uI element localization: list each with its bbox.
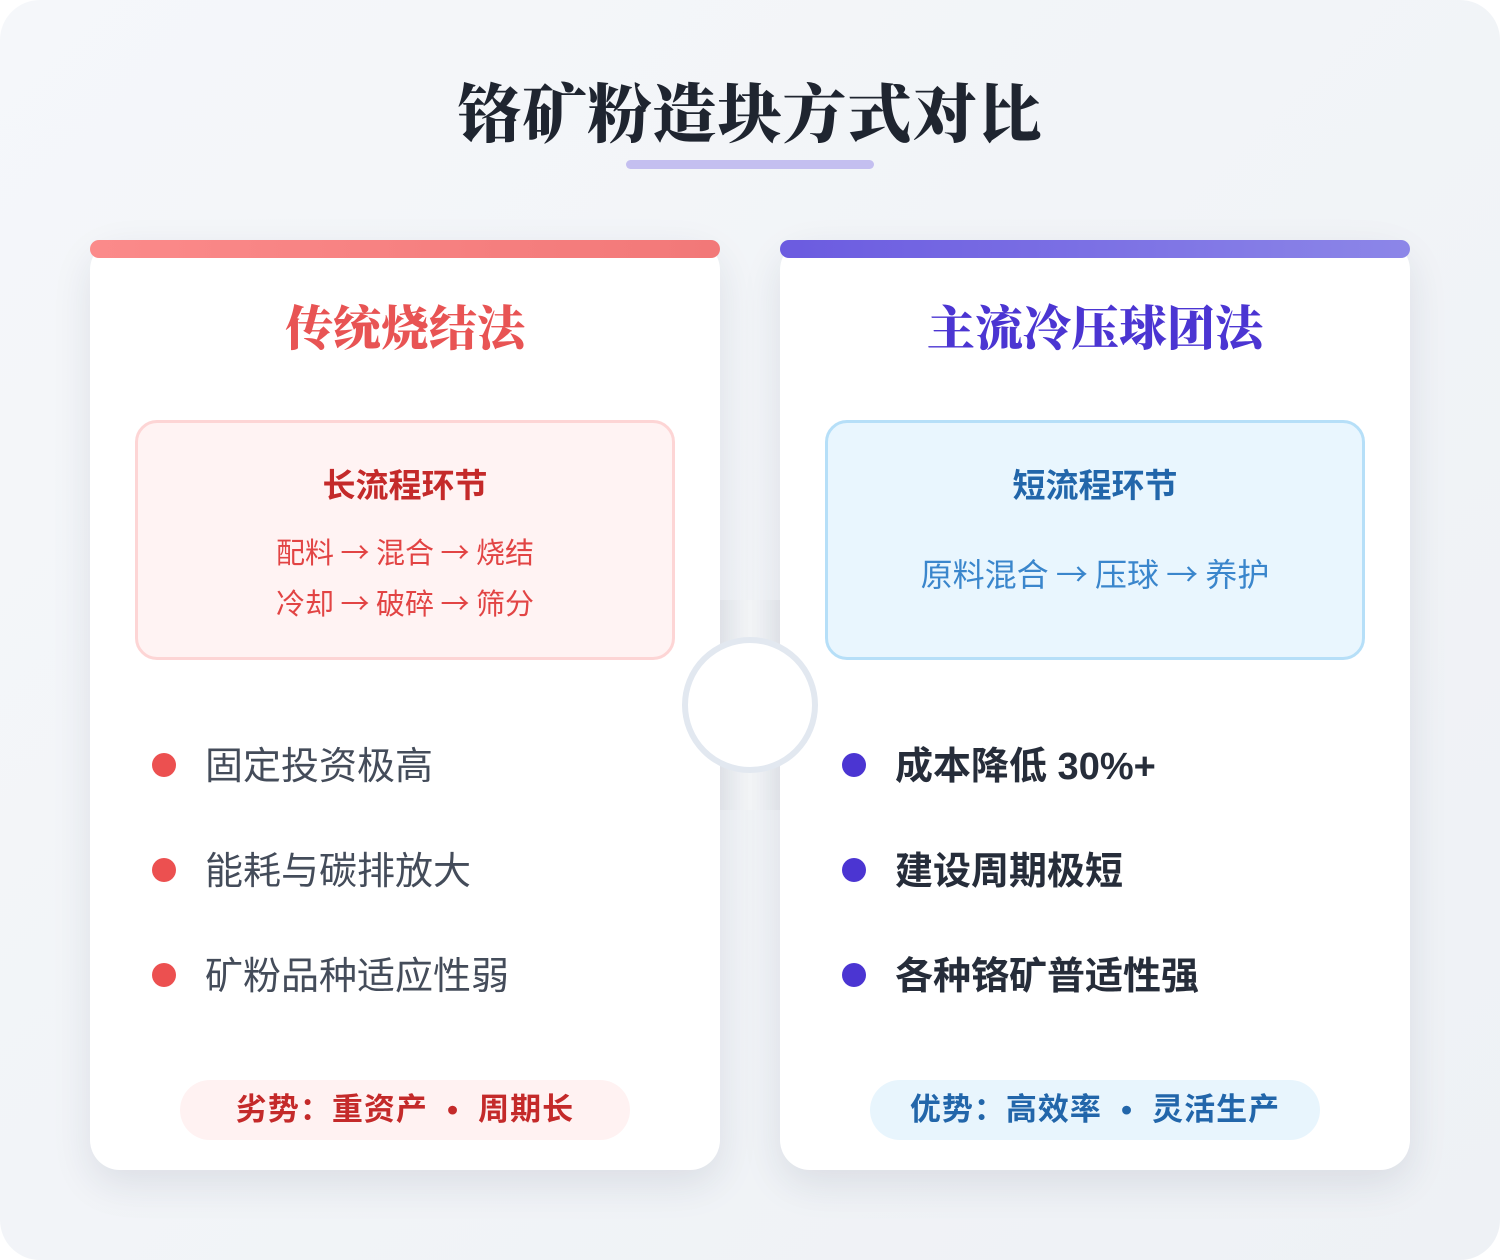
connector bar	[720, 600, 780, 810]
heading: 主流冷压球团法	[927, 290, 1263, 359]
panel: traditional sintering	[90, 240, 720, 1170]
process box: 原料混合 → 压球 → 养护	[921, 550, 1269, 596]
center circle	[682, 637, 818, 773]
panel: cold pressing: 成本降低 30%+	[895, 746, 1156, 788]
panel: traditional sintering: 固定投资极高	[205, 746, 433, 788]
title: 铬矿粉造块方式对比	[458, 64, 1042, 156]
pill: 劣势：重资产 • 周期长	[236, 1092, 574, 1127]
process box	[135, 420, 675, 660]
panel: cold pressing: 各种铬矿普适性强	[895, 956, 1199, 998]
pill	[180, 1080, 630, 1140]
process box	[825, 420, 1365, 660]
process box: 冷却 → 破碎 → 筛分	[276, 581, 534, 623]
pill: 优势：高效率 • 灵活生产	[910, 1092, 1280, 1127]
panel: traditional sintering: 能耗与碳排放大	[205, 851, 471, 893]
process box: 短流程环节	[1012, 467, 1178, 504]
heading: 传统烧结法	[285, 290, 525, 359]
list	[152, 746, 509, 998]
process box: 长流程环节	[322, 467, 488, 504]
list	[842, 746, 1199, 998]
pill	[870, 1080, 1320, 1140]
panel: cold pressing: 建设周期极短	[895, 851, 1123, 893]
process box: 配料 → 混合 → 烧结	[276, 530, 534, 572]
panel: cold pressing	[780, 240, 1410, 1170]
panel: traditional sintering: 矿粉品种适应性弱	[205, 956, 509, 998]
